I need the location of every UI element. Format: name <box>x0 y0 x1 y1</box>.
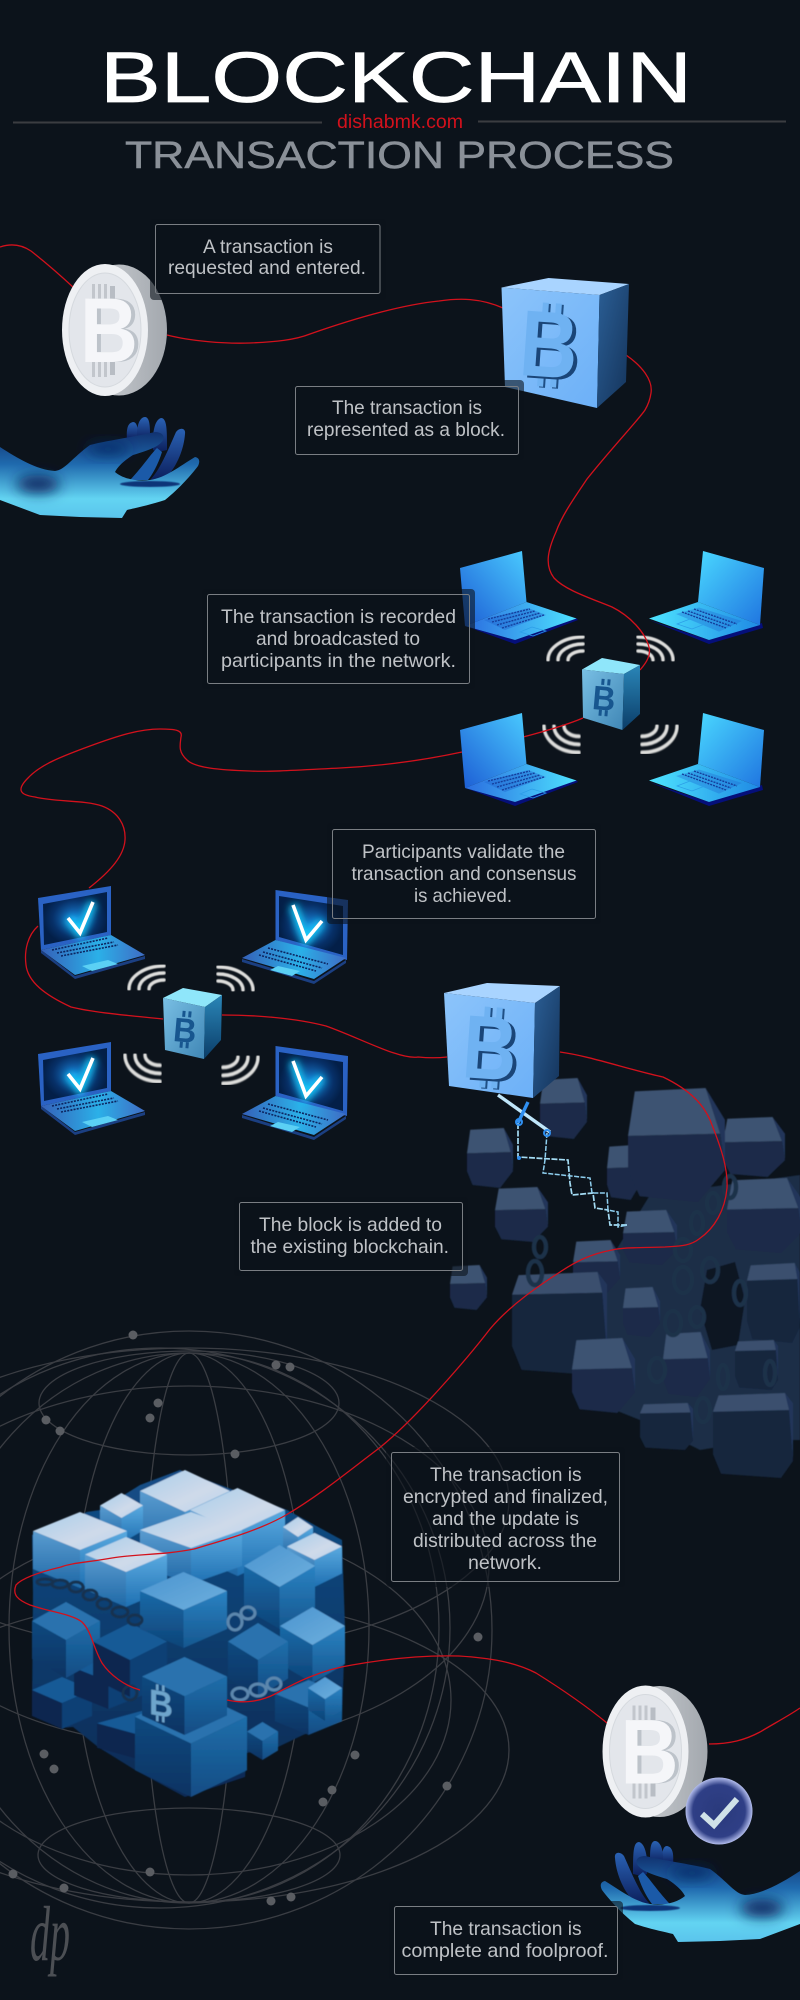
text box: step 4: is achieved. <box>414 885 512 907</box>
text box: step 7: The transaction is <box>430 1918 582 1940</box>
text box: step 5 <box>234 1197 468 1276</box>
faded blockchain cube cluster <box>450 1078 800 1478</box>
text box: step 4: Participants validate the <box>362 841 565 863</box>
text box: step 3 <box>202 589 475 689</box>
text box: step 1 <box>150 219 386 300</box>
wifi signals: validation group <box>125 966 258 1083</box>
icon: hand under coin <box>0 417 199 518</box>
text box: step 7: complete and foolproof. <box>402 1940 608 1962</box>
text box: step 3: participants in the network. <box>221 650 456 672</box>
text box: step 6: encrypted and finalized, <box>403 1486 608 1508</box>
text box: step 1: requested and entered. <box>168 257 366 279</box>
icon: laptop network <box>460 551 764 806</box>
text box: step 7 <box>389 1901 623 1980</box>
wireframe globe <box>0 1330 509 1929</box>
glowing chain attaching the block <box>498 1095 627 1227</box>
text box: step 4: transaction and consensus <box>352 863 577 885</box>
text box: step 6 <box>386 1447 625 1587</box>
text box: step 5: The block is added to <box>259 1214 442 1236</box>
red connector line <box>0 245 800 1744</box>
wifi signals: network group <box>544 637 677 752</box>
icon: bitcoin coin <box>62 264 167 396</box>
icon: bitcoin block <box>502 278 629 408</box>
text box: step 4 <box>327 823 601 924</box>
text box: step 3: The transaction is recorded <box>221 606 456 628</box>
blue chains <box>37 1579 281 1700</box>
bitcoin mark on block: B <box>520 292 585 401</box>
icon: validated laptops <box>38 886 348 1140</box>
icon: block joining chain: B <box>460 997 520 1101</box>
text box: step 6: distributed across the <box>413 1530 597 1552</box>
text box: step 6: network. <box>468 1552 542 1574</box>
icon: final coin: B <box>624 1702 682 1804</box>
text box: step 1: A transaction is <box>203 236 333 258</box>
icon: bitcoin coin: B <box>80 280 138 382</box>
website credit: dishabmk.com <box>337 112 463 133</box>
text box: step 6: The transaction is <box>430 1464 582 1486</box>
bitcoin mark on block: B <box>516 290 582 399</box>
icon: block joining chain: B <box>463 1000 524 1103</box>
text box: step 2: represented as a block. <box>307 419 505 441</box>
icon: bitcoin coin: B <box>84 280 142 382</box>
icon: small block in validation group <box>163 988 222 1059</box>
icon: small block in validation group: B <box>172 1011 198 1051</box>
icon: small block in network: B <box>591 679 617 719</box>
text box: step 6: and the update is <box>432 1508 579 1530</box>
title: BLOCKCHAIN: BLOCKCHAIN <box>100 39 692 118</box>
text box: step 2 <box>290 380 524 460</box>
header: title block <box>13 39 786 177</box>
icon: final coin <box>602 1686 708 1818</box>
subtitle: TRANSACTION PROCESS: TRANSACTION PROCESS <box>125 135 674 177</box>
dark chain links <box>528 1176 775 1422</box>
text box: step 5: the existing blockchain. <box>250 1236 449 1258</box>
icon: small block in network <box>582 658 640 730</box>
icon: final coin: B <box>620 1702 678 1804</box>
text box: step 2: The transaction is <box>332 397 482 419</box>
blue cube cluster with chains <box>32 1470 345 1797</box>
text box: step 3: and broadcasted to <box>256 628 420 650</box>
logo: dp signature: dp <box>30 1890 70 1977</box>
icon: verified badge <box>686 1778 752 1844</box>
icon: block joining chain <box>444 983 560 1103</box>
icon: hand under final coin <box>601 1841 800 1942</box>
bitcoin mark on cube: B <box>149 1681 173 1726</box>
